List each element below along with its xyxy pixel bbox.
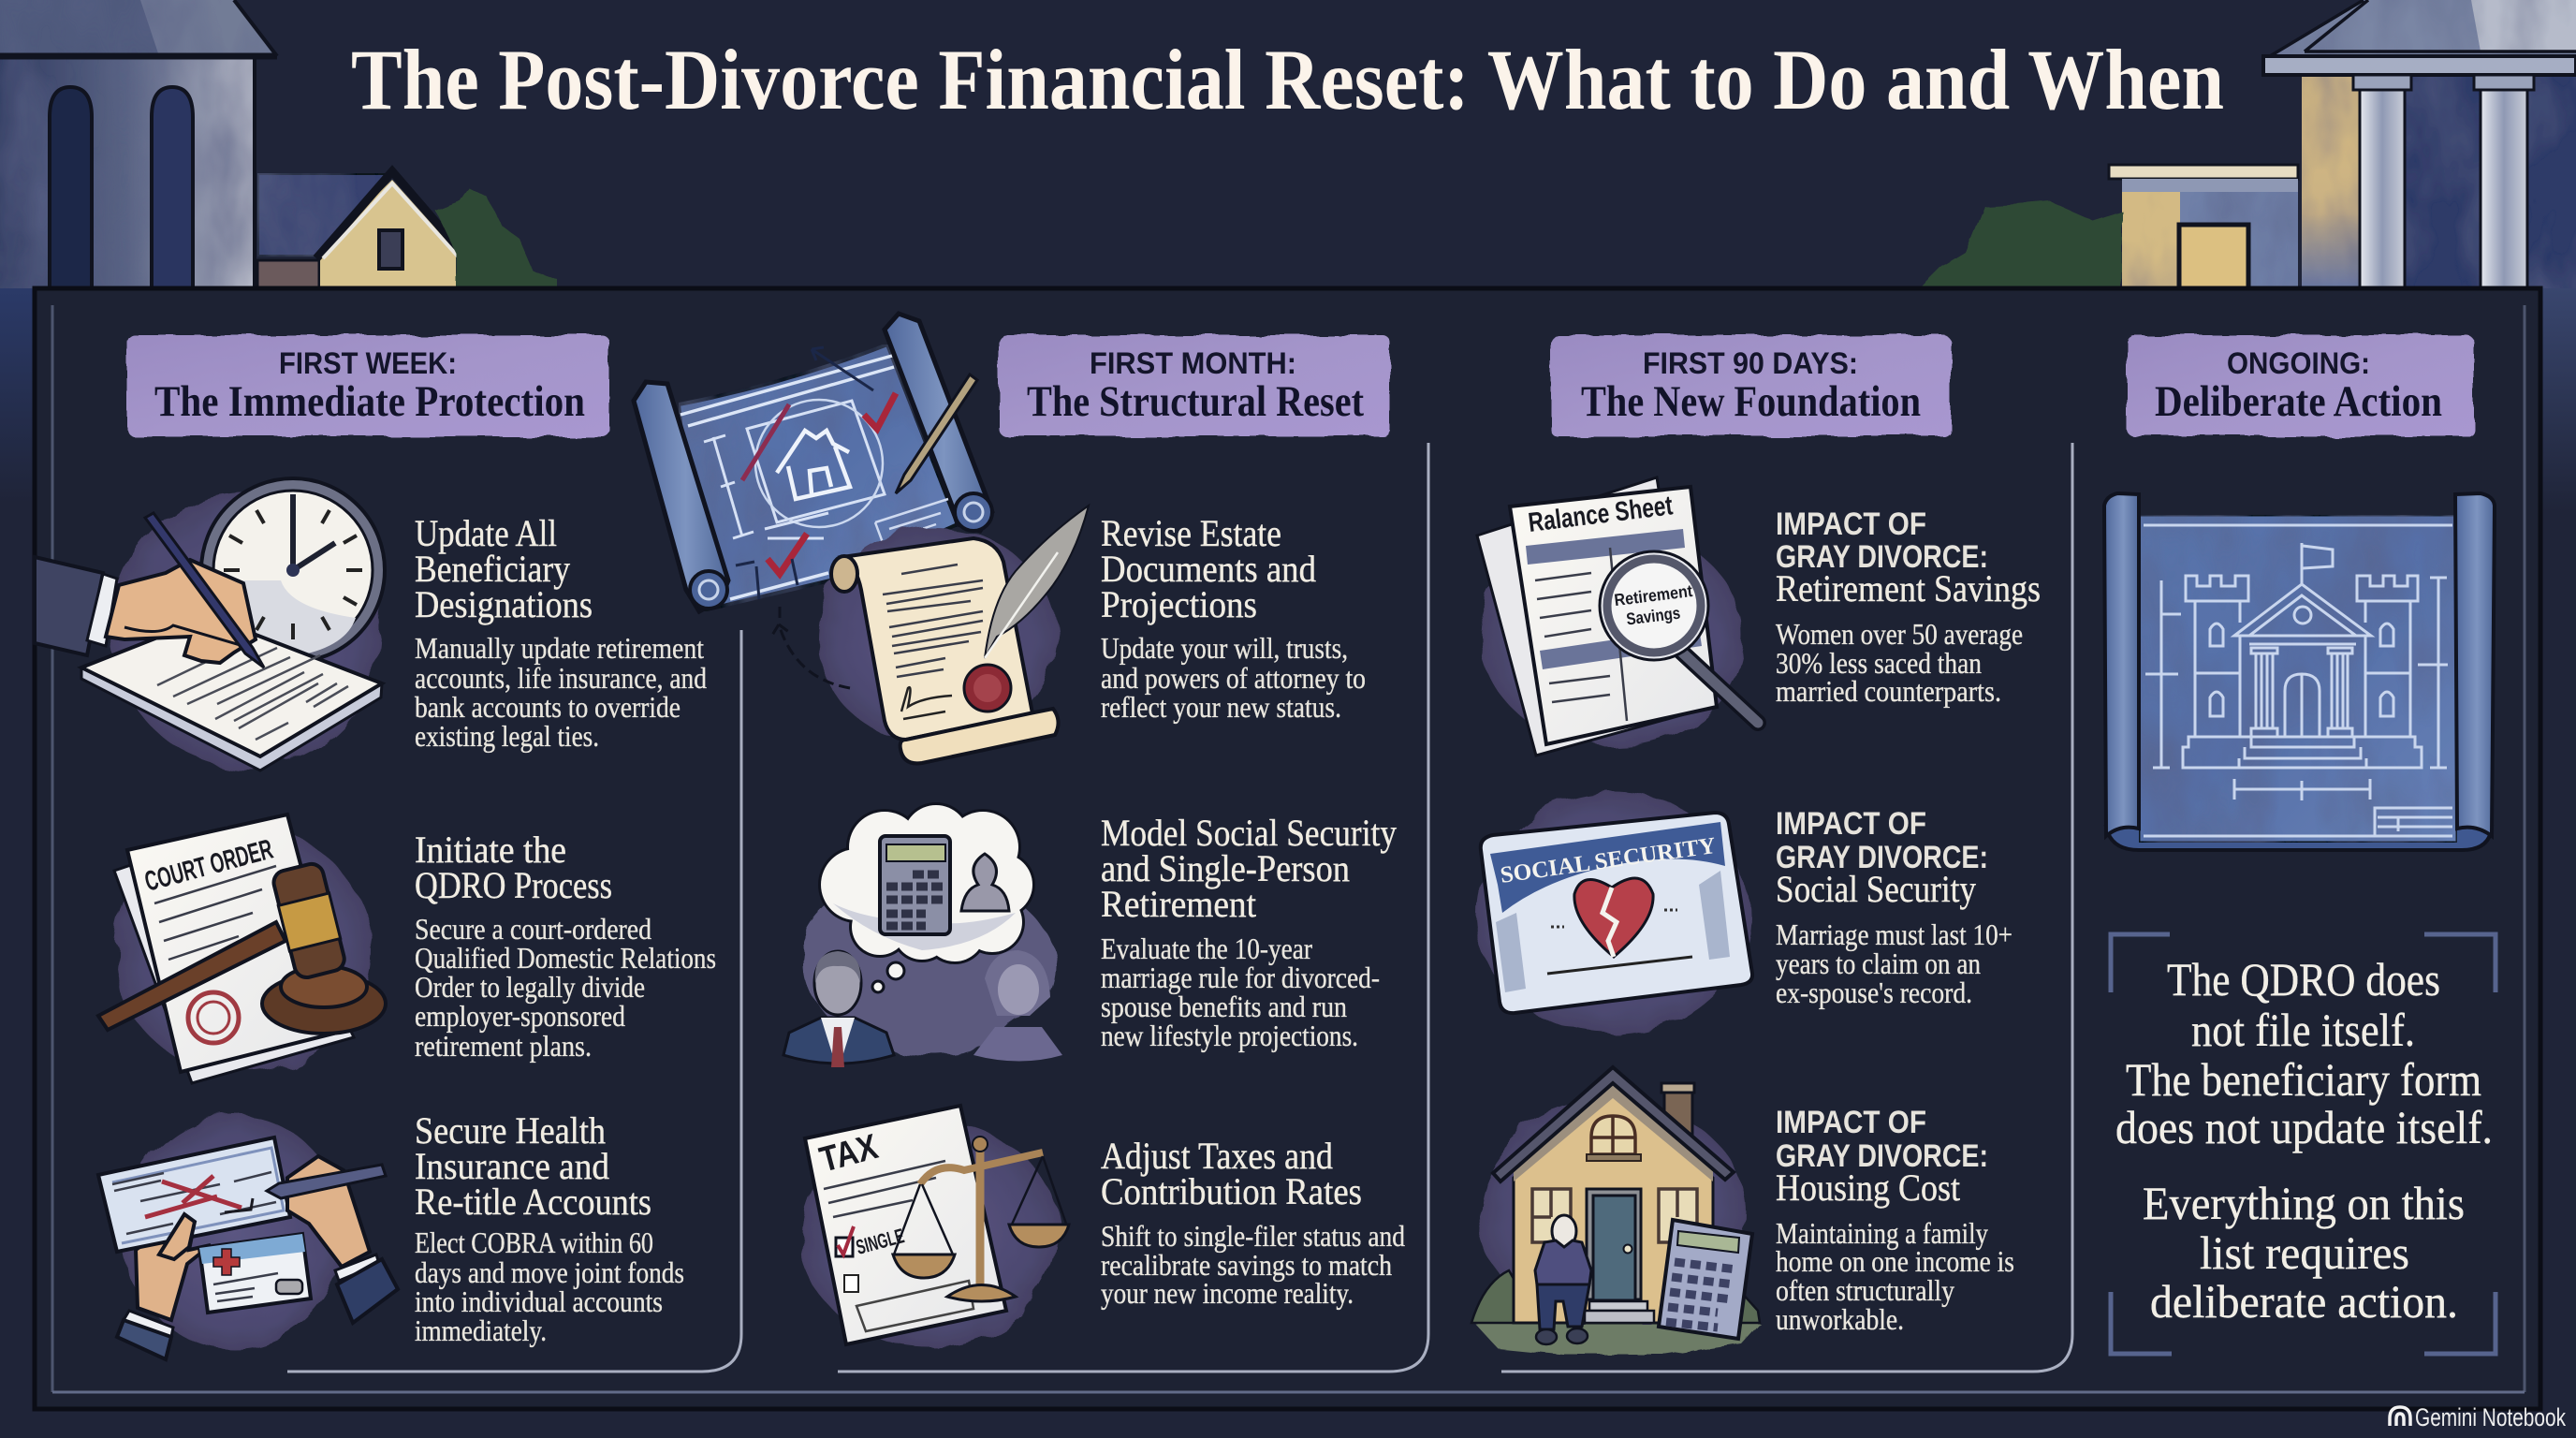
text block: initiate the QDRO process: Qualified Domestic Relations bbox=[415, 941, 716, 975]
text block: housing cost impact: often structurally bbox=[1776, 1273, 1954, 1307]
icon: check, insurance card and hands bbox=[98, 1115, 398, 1359]
text block: adjust taxes: Contribution Rates bbox=[1101, 1170, 1362, 1212]
text block: secure health insurance: into individual accounts bbox=[415, 1284, 663, 1318]
icon: court order and gavel bbox=[98, 814, 386, 1083]
text block: housing cost impact: unworkable. bbox=[1776, 1302, 1904, 1336]
icon: balance sheet and magnifier: Savings bbox=[1625, 604, 1681, 629]
text block: adjust taxes: Adjust Taxes and bbox=[1101, 1135, 1333, 1177]
icon: tax form and balance scale: SINGLE bbox=[854, 1224, 907, 1259]
text block: housing cost impact: Maintaining a family bbox=[1776, 1216, 1988, 1250]
text block: retirement savings impact: IMPACT OF bbox=[1776, 506, 1926, 542]
text block: social security impact: GRAY DIVORCE: bbox=[1776, 840, 1988, 875]
text block: update beneficiary designations: Designations bbox=[415, 583, 593, 625]
text block: retirement savings impact: married counterparts. bbox=[1776, 674, 2001, 708]
callout: deliberate action: does not update itself. bbox=[2115, 1101, 2493, 1153]
callout: deliberate action bbox=[2111, 934, 2496, 1354]
icon: court order and gavel: COURT ORDER bbox=[141, 834, 276, 898]
text block: secure health insurance: Re-title Accounts bbox=[415, 1181, 651, 1223]
text block: update beneficiary designations: Beneficiary bbox=[415, 548, 570, 590]
text block: revise estate documents: and powers of attorney to bbox=[1101, 661, 1366, 695]
text block: model social security: Evaluate the 10-year bbox=[1101, 932, 1312, 965]
text block: initiate the QDRO process: Secure a court-ordered bbox=[415, 912, 651, 946]
text block: update beneficiary designations: Update All bbox=[415, 512, 557, 554]
text block: initiate the QDRO process: Initiate the bbox=[415, 829, 566, 871]
text block: retirement savings impact bbox=[1776, 506, 2041, 708]
text block: social security impact: ex-spouse's record. bbox=[1776, 976, 1972, 1009]
title: The Post-Divorce Financial Reset: What to Do and When bbox=[351, 32, 2224, 127]
column header: ongoing: Deliberate Action bbox=[2155, 377, 2442, 426]
text block: revise estate documents: Update your will, trusts, bbox=[1101, 631, 1348, 665]
icon: social security card with broken heart bbox=[1475, 791, 1752, 1034]
column header: first month: The Structural Reset bbox=[1027, 377, 1364, 426]
text block: revise estate documents: Documents and bbox=[1101, 548, 1316, 590]
text block: housing cost impact bbox=[1776, 1105, 2014, 1336]
column header: ongoing bbox=[2127, 335, 2474, 436]
icon: balance sheet and magnifier: Ralance Sheet bbox=[1527, 491, 1675, 538]
illustration: right courthouse bbox=[1921, 0, 2576, 513]
text block: update beneficiary designations: existing legal ties. bbox=[415, 719, 599, 753]
callout: deliberate action: list requires bbox=[2200, 1226, 2409, 1279]
text block: model social security: Retirement bbox=[1101, 883, 1256, 925]
icon: social security card with broken heart: SOCIAL SECURITY bbox=[1499, 833, 1718, 888]
text block: model social security bbox=[1101, 812, 1397, 1052]
text block: update beneficiary designations bbox=[415, 512, 707, 753]
text block: model social security: Model Social Security bbox=[1101, 812, 1397, 854]
text block: retirement savings impact: Retirement Savings bbox=[1776, 567, 2041, 609]
column header: first 90 days bbox=[1550, 335, 1951, 436]
text block: adjust taxes: your new income reality. bbox=[1101, 1276, 1354, 1310]
callout: deliberate action: The QDRO does bbox=[2167, 953, 2440, 1005]
column header: ongoing: ONGOING: bbox=[2227, 346, 2370, 380]
text block: update beneficiary designations: accounts, life insurance, and bbox=[415, 661, 707, 695]
text block: social security impact: years to claim on an bbox=[1776, 946, 1981, 980]
text block: retirement savings impact: 30% less saced than bbox=[1776, 646, 1982, 680]
illustration: left buildings bbox=[0, 0, 559, 504]
text block: housing cost impact: GRAY DIVORCE: bbox=[1776, 1138, 1988, 1174]
icon: clock, hand and paper bbox=[35, 478, 385, 770]
column header: first 90 days: The New Foundation bbox=[1581, 377, 1921, 426]
text block: initiate the QDRO process: Order to legally divide bbox=[415, 970, 645, 1004]
callout: deliberate action: not file itself. bbox=[2191, 1004, 2415, 1056]
callout: deliberate action: Everything on this bbox=[2143, 1177, 2465, 1229]
text block: secure health insurance bbox=[415, 1109, 684, 1347]
text block: initiate the QDRO process: QDRO Process bbox=[415, 864, 612, 906]
icon: house blueprint bbox=[634, 314, 992, 611]
text block: revise estate documents bbox=[1101, 512, 1366, 724]
text block: revise estate documents: Revise Estate bbox=[1101, 512, 1281, 554]
text block: secure health insurance: Secure Health bbox=[415, 1109, 606, 1152]
main panel bbox=[35, 288, 2540, 1409]
text block: initiate the QDRO process: employer-sponsored bbox=[415, 999, 625, 1033]
icon: pencil on blueprint bbox=[896, 374, 977, 493]
icon: thought cloud, calculator and figures bbox=[783, 802, 1062, 1067]
text block: social security impact: Marriage must last 10+ bbox=[1776, 917, 2012, 951]
text block: adjust taxes bbox=[1101, 1135, 1405, 1310]
icon: tax form and balance scale: TAX bbox=[815, 1127, 883, 1181]
text block: housing cost impact: home on one income is bbox=[1776, 1244, 2014, 1278]
icon: will scroll, quill and wax seal bbox=[771, 506, 1089, 763]
text block: revise estate documents: reflect your new status. bbox=[1101, 690, 1341, 724]
text block: model social security: spouse benefits and run bbox=[1101, 990, 1347, 1023]
text block: model social security: new lifestyle projections. bbox=[1101, 1019, 1358, 1052]
text block: initiate the QDRO process: retirement plans. bbox=[415, 1029, 592, 1063]
icon: castle blueprint bbox=[2104, 493, 2495, 850]
column header: first month: FIRST MONTH: bbox=[1090, 346, 1296, 380]
icon: balance sheet and magnifier bbox=[1477, 477, 1758, 756]
text block: revise estate documents: Projections bbox=[1101, 583, 1257, 625]
column header: first week: The Immediate Protection bbox=[154, 377, 585, 426]
text block: retirement savings impact: Women over 50 average bbox=[1776, 617, 2023, 651]
text block: secure health insurance: Insurance and bbox=[415, 1145, 609, 1187]
text block: adjust taxes: Shift to single-filer status and bbox=[1101, 1219, 1405, 1253]
column header: first 90 days: FIRST 90 DAYS: bbox=[1643, 346, 1858, 380]
icon: tax form and balance scale bbox=[800, 1106, 1069, 1348]
text block: initiate the QDRO process bbox=[415, 829, 716, 1063]
icon: balance sheet and magnifier: Retirement bbox=[1613, 581, 1693, 609]
text block: update beneficiary designations: bank accounts to override bbox=[415, 690, 681, 724]
column header: first week: FIRST WEEK: bbox=[279, 346, 457, 380]
text block: adjust taxes: recalibrate savings to match bbox=[1101, 1248, 1392, 1282]
text block: model social security: and Single-Person bbox=[1101, 847, 1350, 889]
column header: first month bbox=[999, 335, 1390, 436]
text block: secure health insurance: days and move joint fonds bbox=[415, 1255, 684, 1289]
icon: house, seated man and calculator bbox=[1471, 1067, 1760, 1355]
callout: deliberate action: deliberate action. bbox=[2150, 1275, 2458, 1328]
text block: secure health insurance: immediately. bbox=[415, 1313, 547, 1347]
text block: housing cost impact: IMPACT OF bbox=[1776, 1105, 1926, 1140]
column header: first week bbox=[127, 335, 609, 436]
text block: housing cost impact: Housing Cost bbox=[1776, 1167, 1960, 1209]
text block: retirement savings impact: GRAY DIVORCE: bbox=[1776, 539, 1988, 575]
text block: social security impact: IMPACT OF bbox=[1776, 806, 1926, 842]
text block: update beneficiary designations: Manually update retirement bbox=[415, 631, 704, 665]
text block: social security impact bbox=[1776, 806, 2012, 1009]
text block: secure health insurance: Elect COBRA within 60 bbox=[415, 1225, 653, 1259]
callout: deliberate action: The beneficiary form bbox=[2126, 1053, 2481, 1106]
text block: model social security: marriage rule for divorced- bbox=[1101, 961, 1380, 994]
text block: social security impact: Social Security bbox=[1776, 868, 1976, 910]
